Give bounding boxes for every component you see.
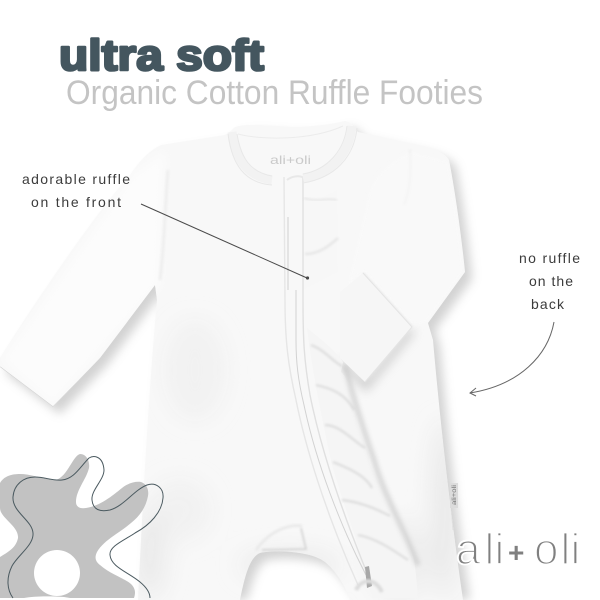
- seam: right shoulder: [404, 150, 411, 205]
- brand logo: +: [508, 537, 524, 568]
- blob outline: [8, 457, 163, 598]
- left sleeve highlight: [148, 293, 149, 294]
- blob bottom cut: [24, 596, 70, 598]
- callout: no ruffle: on the: [529, 273, 573, 289]
- callout: no ruffle: [519, 250, 580, 312]
- seam: left sleeve: [160, 170, 168, 280]
- callout: adorable ruffle: adorable ruffle: [22, 171, 130, 187]
- callout: adorable ruffle: on the front: [31, 194, 121, 210]
- brand logo: [456, 525, 580, 574]
- subtitle: Organic Cotton Ruffle Footies: [66, 74, 483, 112]
- title: ultra soft: ultra soft: [59, 31, 264, 80]
- folded cuff: [340, 273, 412, 382]
- callout: adorable ruffle: [22, 171, 130, 210]
- seam: sleeve hem: [0, 366, 88, 407]
- ruffle upper: [304, 198, 338, 256]
- ruffle lower: [310, 344, 420, 566]
- crotch gusset: [256, 526, 306, 550]
- arrow: to ruffle: [141, 204, 309, 280]
- zipper: [284, 176, 372, 585]
- collar: [228, 126, 357, 185]
- callout: no ruffle: back: [531, 296, 565, 312]
- decorative blob: [0, 454, 163, 598]
- collar brand label: ali+oli: [270, 153, 311, 167]
- side tag: [450, 483, 458, 508]
- right sleeve: [398, 154, 410, 312]
- onesie garment: [0, 121, 472, 600]
- cuff shadow: [340, 330, 412, 386]
- fabric folds: [140, 446, 455, 585]
- brand logo: oli: [534, 525, 580, 574]
- arrow: curved to back: [470, 322, 554, 396]
- side tag: ali+oli: [451, 485, 458, 505]
- body side seam: [451, 514, 454, 530]
- brand logo: ali: [456, 525, 504, 574]
- callout: no ruffle: no ruffle: [519, 250, 580, 266]
- zipper pull: [356, 566, 382, 592]
